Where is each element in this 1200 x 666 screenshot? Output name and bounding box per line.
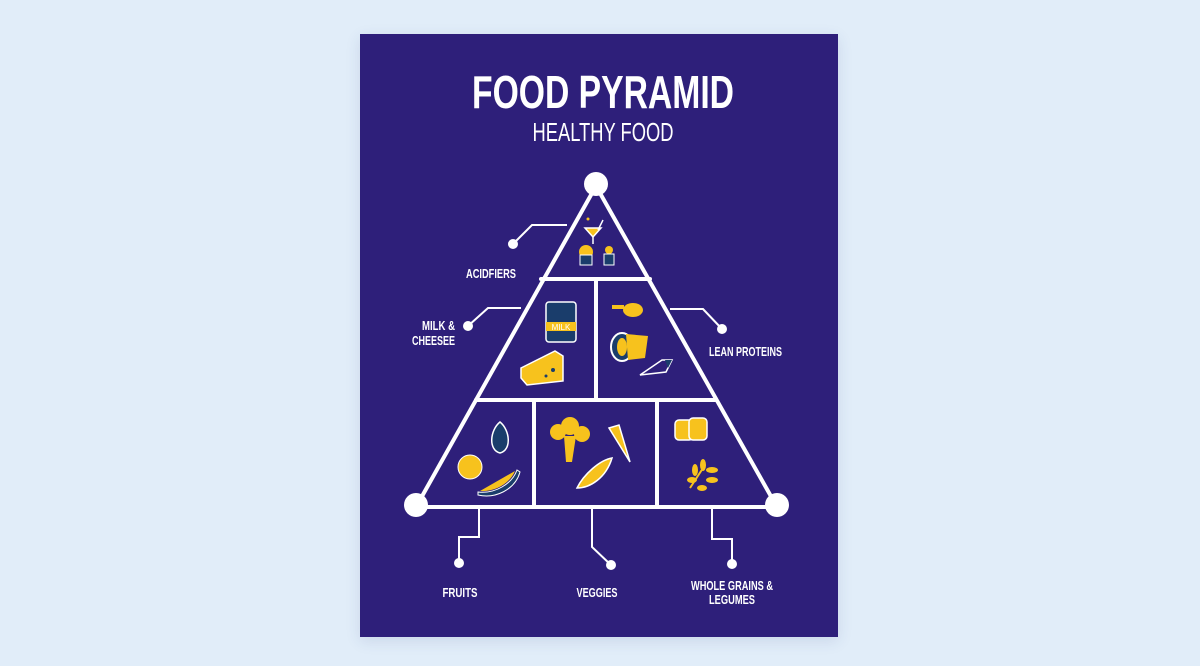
labels: LEGUMES <box>709 592 755 607</box>
icons: acidifiers <box>579 218 614 265</box>
leader dots <box>454 239 737 570</box>
poster card <box>360 34 838 637</box>
icons: milk and cheese <box>521 302 576 385</box>
icons: grains <box>675 418 718 491</box>
labels: WHOLE GRAINS & <box>691 578 773 593</box>
labels: FRUITS <box>442 585 478 600</box>
labels: LEAN PROTEINS <box>709 344 782 359</box>
icons: fruits <box>458 422 520 496</box>
icons: milk and cheese: MILK <box>552 323 571 332</box>
subtitle: HEALTHY FOOD <box>532 117 674 147</box>
labels: CHEESEE <box>412 333 455 348</box>
title: FOOD PYRAMID <box>472 66 734 118</box>
icons: lean proteins <box>611 303 672 375</box>
icons: veggies <box>550 417 630 488</box>
pyramid frame <box>416 186 777 507</box>
leader lines <box>459 225 732 565</box>
labels: ACIDFIERS <box>466 266 516 281</box>
labels <box>412 266 782 607</box>
labels: MILK & <box>422 318 455 333</box>
corner nodes <box>404 172 789 517</box>
labels: VEGGIES <box>576 585 618 600</box>
